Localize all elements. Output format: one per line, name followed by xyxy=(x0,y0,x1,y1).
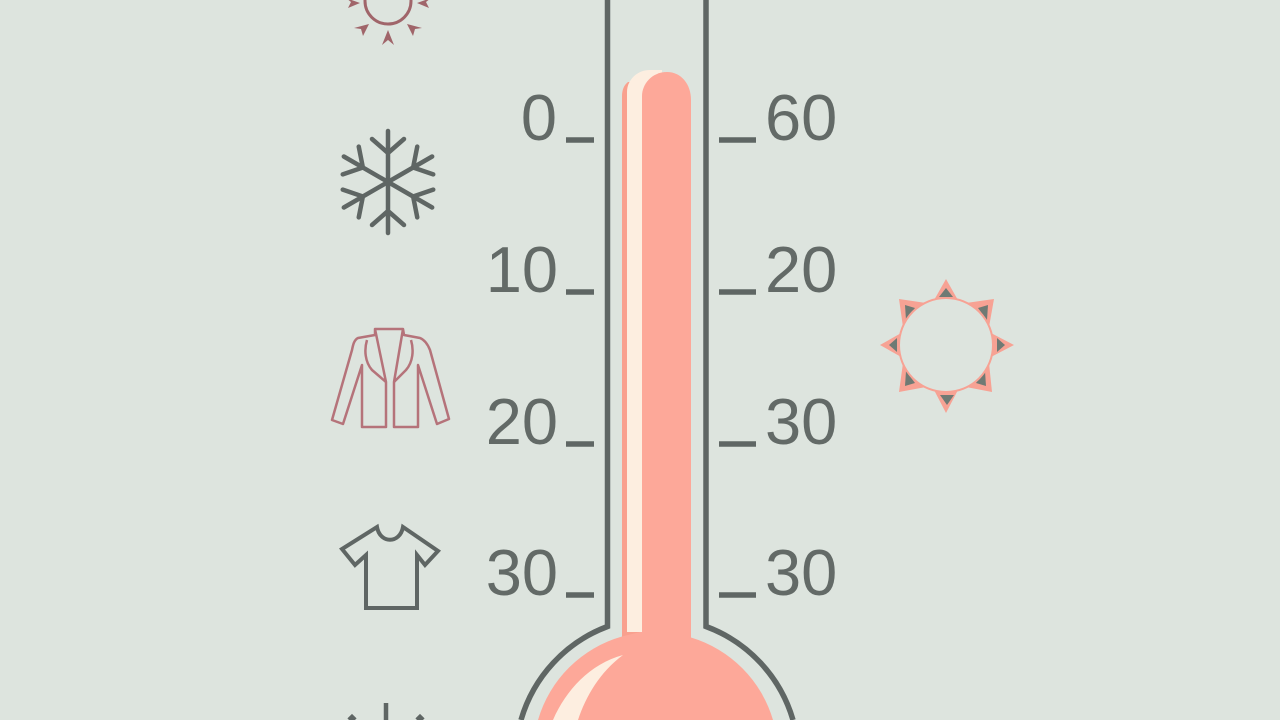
right tick marks xyxy=(719,140,756,595)
label 20: 20 xyxy=(486,385,558,458)
icon: snowflake partially cropped xyxy=(349,703,423,720)
label 30: 30 xyxy=(486,536,558,609)
ray centres xyxy=(889,288,1005,405)
label 30: 30 xyxy=(765,385,837,458)
column back stripe xyxy=(622,82,645,640)
sun disc xyxy=(899,298,993,392)
thermometer glass outline xyxy=(521,0,793,720)
mercury column and bulb xyxy=(538,70,773,720)
column fill xyxy=(642,72,691,640)
label 10: 10 xyxy=(486,233,558,306)
thermometer xyxy=(521,0,793,720)
right scale xyxy=(719,81,837,609)
column highlight xyxy=(627,70,662,632)
left scale xyxy=(486,81,594,609)
icon: t-shirt xyxy=(342,527,438,608)
label 20: 20 xyxy=(765,233,837,306)
icon: jacket xyxy=(332,329,449,427)
icon: sun partially cropped xyxy=(346,0,431,45)
icon: snowflake xyxy=(336,131,440,233)
bulb highlight xyxy=(553,655,623,720)
label 30 lower: 30 xyxy=(765,536,837,609)
label 60: 60 xyxy=(765,81,837,154)
left tick marks xyxy=(566,140,594,595)
sun rays xyxy=(880,279,1014,413)
icon: sun outline xyxy=(880,279,1014,413)
label 0: 0 xyxy=(521,81,557,154)
bulb fill xyxy=(538,632,773,720)
